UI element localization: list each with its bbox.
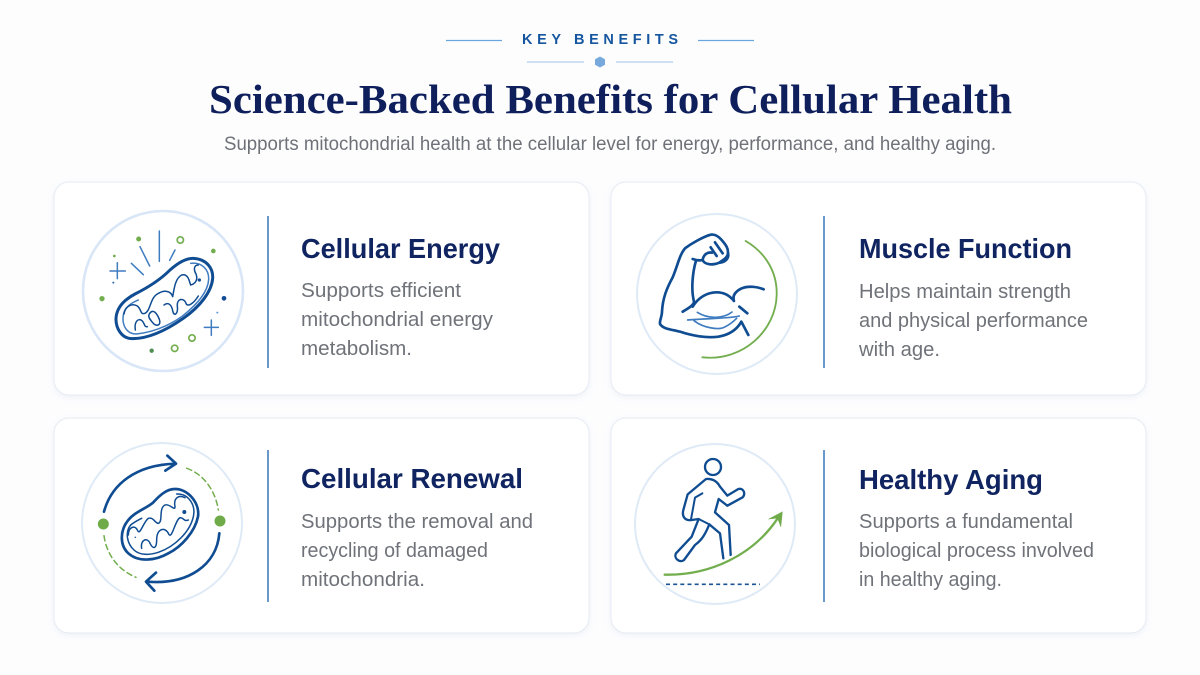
panel: healthy aging [611, 418, 1146, 633]
ornament: hexagon divider [527, 56, 673, 68]
description: recycling of damaged [301, 540, 488, 562]
panel: muscle function [611, 182, 1146, 395]
header [209, 32, 1012, 155]
subtitle: Supports mitochondrial health at the cellular level for energy, performance, and healthy aging. [224, 134, 996, 155]
eyebrow: key benefits: KEY BENEFITS [522, 32, 678, 48]
description [301, 280, 493, 360]
description [858, 281, 1088, 361]
heading: Muscle Function [859, 233, 1072, 264]
description [859, 511, 1094, 591]
description: biological process involved [859, 540, 1094, 562]
icon: mitochondrion recycling [82, 443, 242, 603]
panel: cellular renewal [54, 418, 589, 633]
description: Supports efficient [301, 280, 461, 302]
panel: cellular energy [54, 182, 589, 395]
icon: walking figure with rising arrow [635, 444, 795, 604]
description: metabolism. [301, 338, 412, 360]
description: mitochondria. [301, 569, 425, 591]
description: mitochondrial energy [301, 309, 493, 331]
heading: Cellular Renewal [301, 463, 523, 494]
title: Science-Backed Benefits for Cellular Health [209, 76, 1012, 122]
heading: Healthy Aging [859, 464, 1043, 495]
icon: flexed arm [637, 214, 797, 374]
heading: Cellular Energy [301, 233, 501, 264]
description: Supports the removal and [301, 511, 533, 533]
icon: mitochondrion with sparks [83, 211, 243, 371]
description: Supports a fundamental [859, 511, 1073, 533]
description: Helps maintain strength [859, 281, 1071, 303]
description: in healthy aging. [859, 569, 1002, 591]
description [301, 511, 533, 591]
description: with age. [858, 339, 940, 361]
description: and physical performance [859, 310, 1088, 332]
